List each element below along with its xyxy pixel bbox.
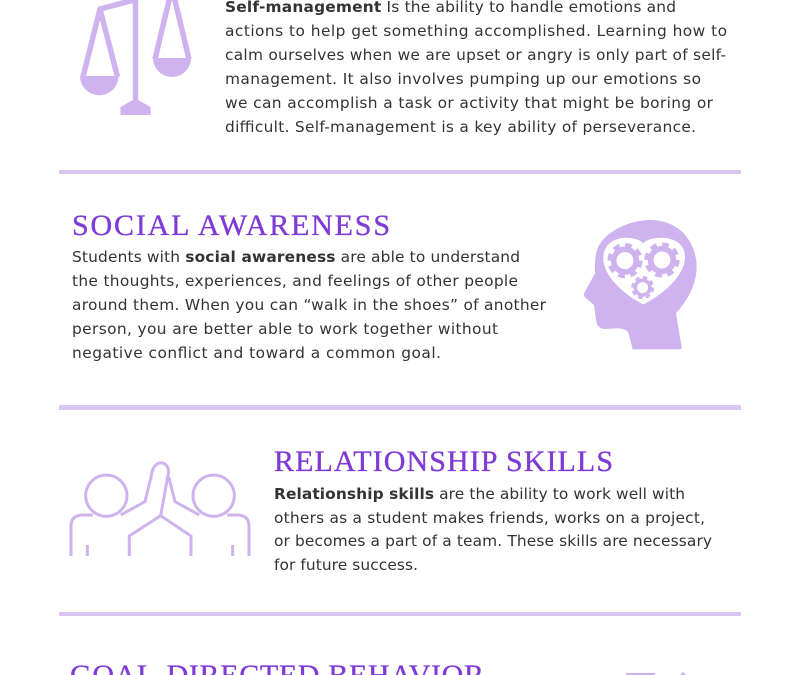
text block: self-management: actions to help get something accomplished. Learning how to: [225, 22, 727, 40]
heading: social awareness: SOCIAL AWARENESS: [72, 209, 390, 242]
text block: social awareness: [72, 248, 547, 362]
text block: relationship skills: [274, 485, 712, 574]
text block: relationship skills: Relationship skills are the ability to work well with: [274, 485, 685, 503]
text block: relationship skills: others as a student makes friends, works on a project,: [274, 509, 705, 527]
icon: balance scale: [80, 0, 191, 115]
icon: two people high five: [71, 463, 249, 556]
text block: relationship skills: or becomes a part of a team. These skills are necessary: [274, 532, 712, 550]
text block: social awareness: negative conflict and toward a common goal.: [72, 344, 441, 362]
text block: self-management: management. It also involves pumping up our emotions so: [225, 70, 701, 88]
text block: social awareness: person, you are better able to work together without: [72, 320, 498, 338]
text block: self-management: we can accomplish a task or activity that might be boring or: [225, 94, 714, 112]
text block: social awareness: around them. When you can “walk in the shoes” of another: [72, 296, 547, 314]
text block: social awareness: the thoughts, experiences, and feelings of other people: [72, 272, 518, 290]
text block: self-management: difficult. Self-management is a key ability of perseverance.: [225, 118, 696, 136]
icon: head with heart and gears: [584, 220, 697, 349]
text block: self-management: calm ourselves when we are upset or angry is only part of self-: [225, 46, 726, 64]
text block: social awareness: Students with social awareness are able to understand: [72, 248, 520, 266]
text block: relationship skills: for future success.: [274, 556, 418, 574]
text block: self-management: [225, 0, 727, 136]
icon: goal icon, cropped: [626, 672, 686, 675]
heading: relationship skills: RELATIONSHIP SKILLS: [274, 445, 613, 478]
